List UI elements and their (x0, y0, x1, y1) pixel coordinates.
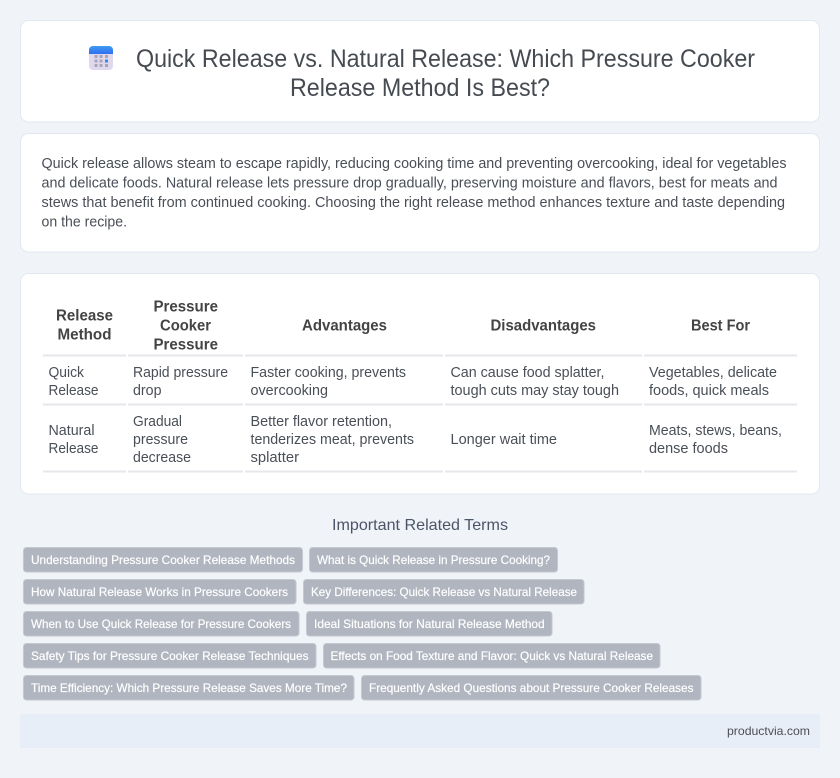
tag (304, 580, 584, 604)
table header row (56, 298, 750, 354)
table header row: Advantages (302, 318, 387, 334)
tag (310, 548, 558, 572)
title: Quick Release vs. Natural Release: Which Pressure Cooker (136, 45, 755, 73)
table header row: Disadvantages (490, 318, 596, 334)
table row: natural release: dense foods (649, 441, 728, 457)
table row: quick release (48, 365, 777, 399)
table row: natural release: Longer wait time (450, 432, 557, 448)
text block: introduction: Quick release allows steam to escape rapidly, reducing cooking time and preventing overcooking, ideal for vegetables (42, 156, 786, 172)
tag: How Natural Release Works in Pressure Cookers (31, 585, 288, 599)
table row: natural release: Release (48, 441, 98, 457)
tag: Safety Tips for Pressure Cooker Release Techniques (31, 649, 308, 663)
table row: quick release: drop (133, 383, 162, 399)
tag (306, 612, 552, 636)
table header row: Best For (691, 318, 750, 334)
table row: quick release: tough cuts may stay tough (450, 383, 619, 399)
tag (24, 612, 299, 636)
panel: title header (20, 20, 820, 122)
tag (24, 644, 316, 668)
table row: natural release: tenderizes meat, prevents (250, 432, 414, 448)
table row: natural release: splatter (250, 450, 299, 466)
text block: introduction: on the recipe. (42, 214, 127, 230)
table header row: Pressure (154, 298, 218, 316)
table row: quick release: Can cause food splatter, (450, 365, 604, 381)
table row: quick release: foods, quick meals (649, 383, 769, 399)
table header row: Release (56, 308, 113, 324)
tag: Understanding Pressure Cooker Release Methods (31, 553, 295, 567)
table row: natural release (48, 414, 782, 466)
table row: natural release: Natural (48, 423, 94, 439)
tag: Ideal Situations for Natural Release Method (314, 617, 545, 631)
title (136, 45, 755, 102)
table row: natural release: Gradual (133, 414, 182, 430)
table row: quick release: Release (48, 383, 98, 399)
table row: quick release: Quick (48, 365, 85, 381)
table header row: Method (58, 326, 112, 344)
tag (24, 580, 296, 604)
panel: comparison table (20, 274, 820, 494)
text block: introduction: and delicate foods. Natural release lets pressure drop gradually, preserving moisture and flavors, best for meats and (42, 176, 778, 192)
tag (24, 548, 302, 572)
table row: quick release: Vegetables, delicate (649, 365, 777, 381)
title: Release Method Is Best? (290, 74, 550, 102)
tag: When to Use Quick Release for Pressure Cookers (31, 617, 291, 631)
table header row: Cooker (160, 318, 211, 334)
panel: related term tags (24, 548, 701, 700)
text block: introduction (42, 156, 786, 230)
tag: What is Quick Release in Pressure Cooking? (317, 553, 550, 567)
table row: natural release: Better flavor retention, (250, 414, 392, 430)
table row: natural release: pressure (133, 432, 188, 448)
icon: calendar (89, 46, 113, 70)
table row: quick release: Rapid pressure (133, 365, 228, 381)
table row: natural release: Meats, stews, beans, (649, 423, 782, 439)
tag (362, 676, 701, 700)
tag: Frequently Asked Questions about Pressure Cooker Releases (369, 681, 694, 695)
tag: Effects on Food Texture and Flavor: Quick vs Natural Release (330, 649, 653, 663)
tag: Key Differences: Quick Release vs Natural Release (311, 585, 577, 599)
tag (24, 676, 354, 700)
text block: introduction: stews that benefit from continued cooking. Choosing the right release method enhances texture and taste depending (42, 195, 785, 211)
panel: intro text (20, 134, 820, 252)
heading: important related terms: Important Related Terms (332, 517, 508, 534)
footer: productvia.com (727, 724, 810, 738)
tag: Time Efficiency: Which Pressure Release Saves More Time? (31, 681, 347, 695)
table row: natural release: decrease (133, 450, 191, 466)
table row: quick release: overcooking (250, 383, 328, 399)
footer (20, 714, 820, 748)
tag (324, 644, 660, 668)
table row: quick release: Faster cooking, prevents (250, 365, 406, 381)
table header row: Pressure (154, 336, 218, 354)
